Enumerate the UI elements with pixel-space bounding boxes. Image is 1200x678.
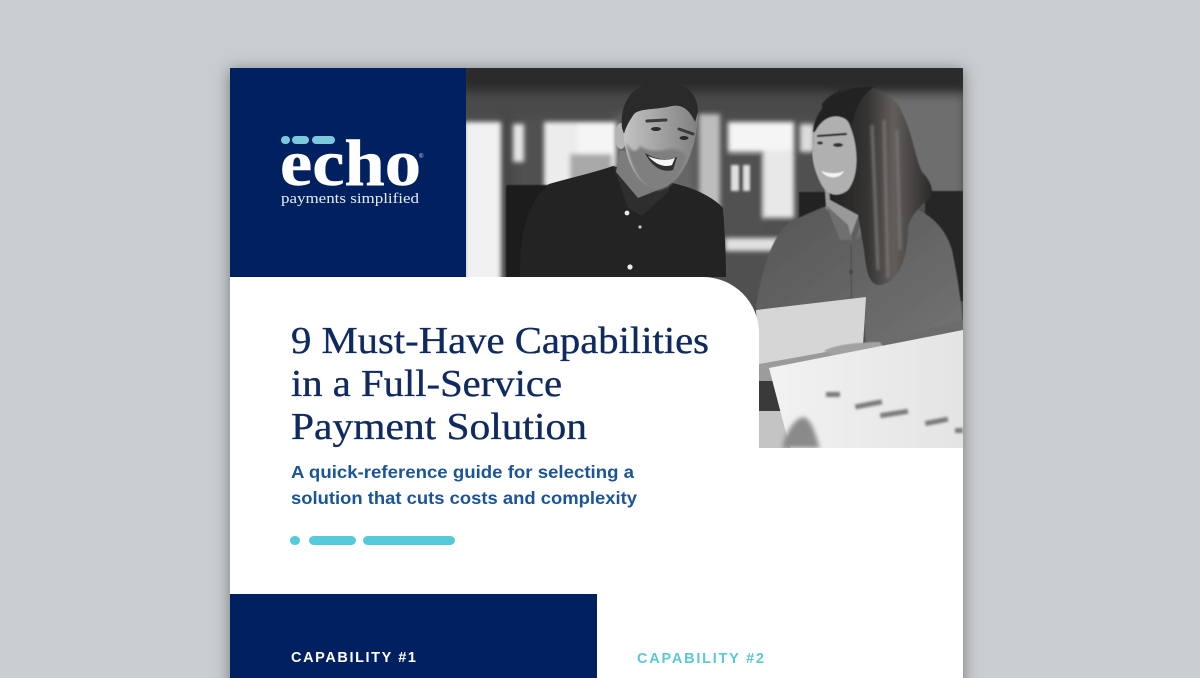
dark laptop strip — [759, 364, 784, 382]
office background — [460, 60, 970, 448]
blouse — [756, 200, 963, 345]
logo dots — [281, 136, 335, 144]
heading — [291, 320, 709, 448]
heading: Payment Solution — [291, 406, 587, 448]
shirt — [520, 166, 726, 277]
hair — [622, 81, 698, 134]
decorative dash motif — [290, 536, 455, 545]
mouth — [645, 153, 677, 171]
chairs — [506, 185, 963, 301]
capability 1 label: CAPABILITY #1 — [291, 650, 416, 666]
man — [520, 81, 726, 277]
panel: capability 1 — [230, 594, 597, 678]
registered mark: ® — [419, 153, 424, 160]
logo panel — [230, 68, 466, 277]
logo tagline: payments simplified — [281, 191, 420, 207]
neck — [616, 150, 676, 198]
sleeve above foreground page — [860, 320, 963, 370]
photo: two colleagues smiling at a table — [466, 68, 963, 448]
foreground report page — [769, 330, 963, 448]
logo: echo payments simplified — [280, 127, 424, 207]
face — [623, 95, 698, 188]
collar — [826, 200, 880, 240]
table — [759, 350, 963, 448]
heading: 9 Must-Have Capabilities — [291, 320, 709, 362]
hand on paper — [824, 342, 884, 358]
beard — [626, 142, 686, 190]
document page — [230, 68, 963, 678]
smile — [648, 156, 675, 166]
logo wordmark: echo — [280, 127, 421, 200]
capability 2 label: CAPABILITY #2 — [637, 651, 764, 667]
neck — [824, 180, 866, 238]
face — [812, 116, 856, 195]
title card — [230, 277, 759, 448]
woman — [756, 87, 963, 345]
held paper — [756, 297, 866, 364]
hair back — [822, 87, 932, 285]
subtitle — [291, 462, 637, 508]
subtitle: A quick-reference guide for selecting a — [291, 462, 634, 482]
heading: in a Full-Service — [291, 363, 562, 405]
hair fringe — [813, 87, 874, 132]
subtitle: solution that cuts costs and complexity — [291, 488, 637, 508]
ear — [615, 123, 627, 149]
